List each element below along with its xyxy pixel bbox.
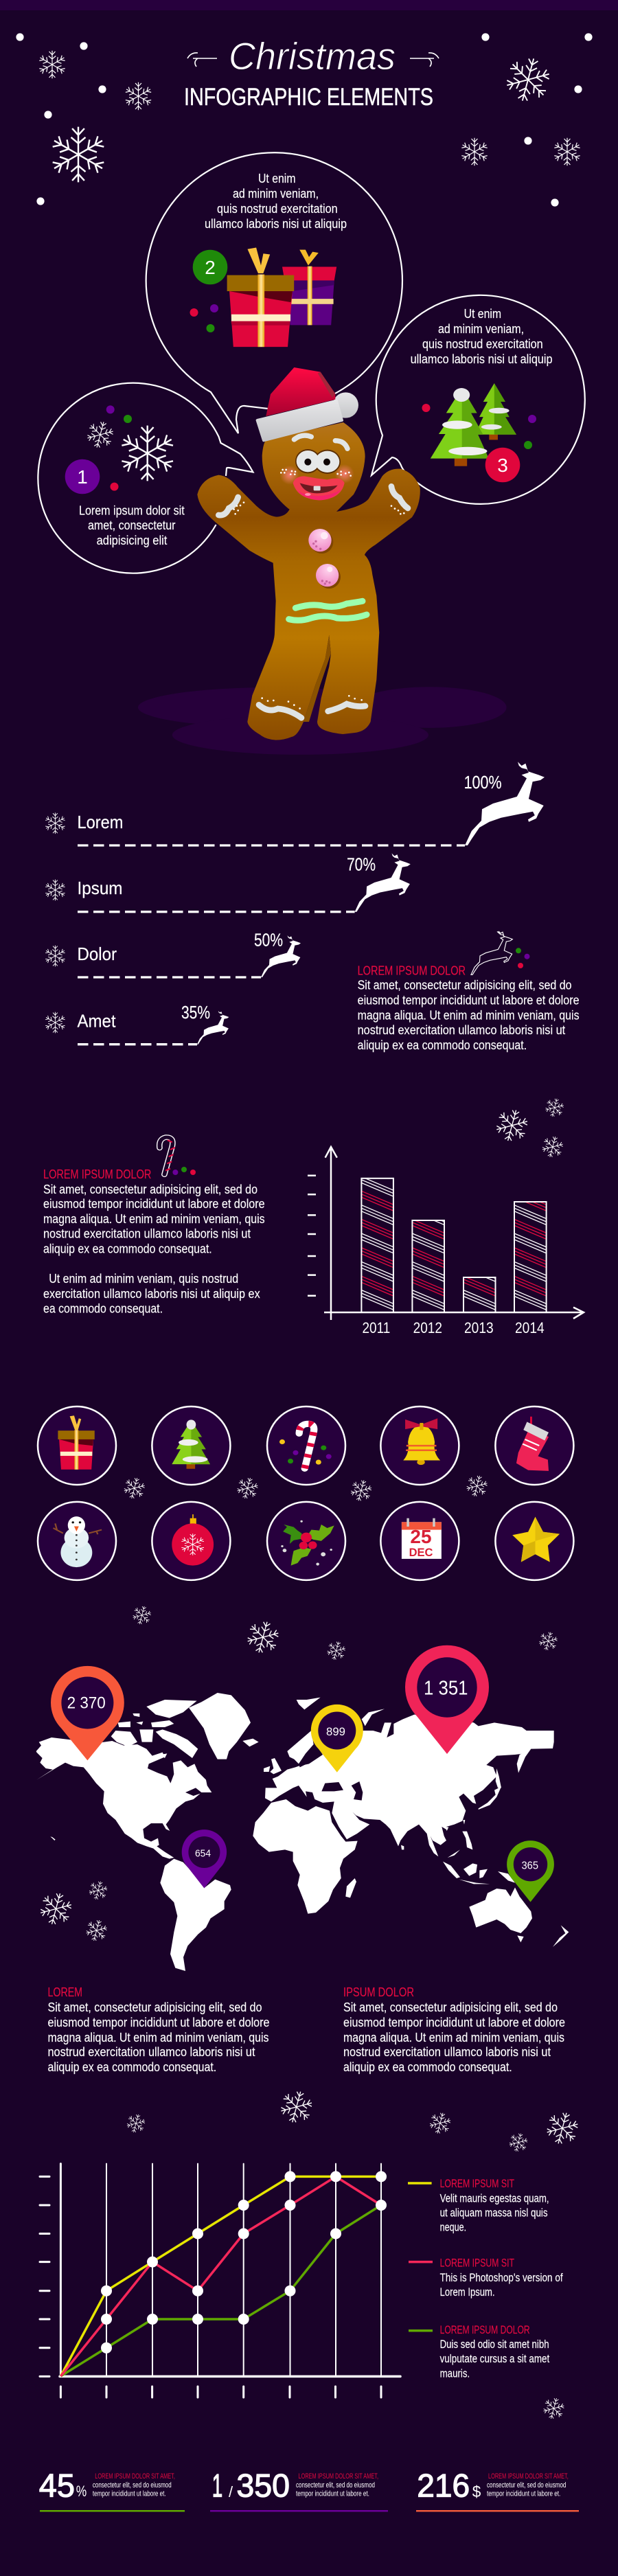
year labels: 2012 (413, 1319, 442, 1336)
row: Lorem (45, 762, 545, 845)
panel: icon grid (38, 1406, 573, 1580)
pin: 899 (311, 1705, 363, 1773)
series: green (60, 2205, 381, 2376)
stat: 216$: consectetur elit, sed do eiusmod (487, 2481, 566, 2489)
text block: Ipsum Dolor: magna aliqua. Ut enim ad minim veniam, quis (343, 2031, 564, 2044)
row: Dolor: 50% (254, 930, 283, 950)
legend item green: vulputate cursus a sit amet (440, 2352, 549, 2365)
grid and axes (40, 2164, 400, 2397)
bubble 1 text (79, 504, 185, 547)
text block: Ipsum Dolor: aliquip ex ea commodo consequat. (343, 2060, 512, 2074)
dots (422, 404, 536, 449)
text block: Ipsum Dolor: eiusmod tempor incididunt ut labore et dolore (343, 2016, 565, 2029)
text block with candy cane (43, 1137, 265, 1316)
paragraph: magna aliqua. Ut enim ad minim veniam, quis (43, 1212, 265, 1226)
legend item green: mauris. (440, 2367, 470, 2380)
snowflakes above map (36, 1604, 560, 1944)
subtitle: INFOGRAPHIC ELEMENTS (184, 83, 433, 111)
text block: Ipsum Dolor: nostrud exercitation ullamco laboris nisi ut (343, 2045, 551, 2059)
paragraph: exercitation ullamco laboris nisi ut aliquip ex (43, 1287, 260, 1301)
axes (308, 1147, 584, 1320)
text block: Ipsum Dolor: IPSUM DOLOR (343, 1985, 414, 1999)
paragraph: Sit amet, consectetur adipisicing elit, sed do (43, 1183, 258, 1196)
icon: holly (281, 1520, 334, 1566)
paragraph: aliquip ex ea commodo consequat. (358, 1038, 527, 1052)
legend item green (409, 2324, 549, 2380)
bubble 3 text: ullamco laboris nisi ut aliquip (411, 352, 553, 366)
pin: 365: 365 (522, 1860, 538, 1871)
bar 2014 (514, 1201, 547, 1312)
icon: gift (58, 1415, 95, 1470)
dots (190, 304, 218, 332)
icon: fir trees (431, 383, 516, 466)
calendar date: DEC (409, 1547, 433, 1559)
pin: 654 (182, 1830, 227, 1889)
bubble 3 (371, 295, 585, 504)
row: Lorem: Lorem (77, 812, 124, 832)
text block: Lorem: aliquip ex ea commodo consequat. (48, 2060, 216, 2074)
icons (53, 1415, 560, 1567)
icon: candy cane (279, 1424, 332, 1468)
row: Ipsum: Ipsum (77, 878, 122, 898)
badge 1: 1 (77, 466, 88, 488)
text block: Ipsum Dolor: Sit amet, consectetur adipisicing elit, sed do (343, 2001, 558, 2014)
bar 2013 (463, 1277, 496, 1312)
circle outlines (38, 1406, 573, 1580)
pin: 654: 654 (195, 1849, 211, 1860)
legend item red: Lorem Ipsum. (440, 2286, 495, 2299)
row: Amet: Amet (77, 1010, 116, 1031)
stat: 216$ (416, 2467, 579, 2511)
paragraph (43, 1183, 265, 1316)
bubble 1 text: Lorem ipsum dolor sit (79, 504, 185, 518)
legend (408, 2178, 563, 2380)
paragraph: eiusmod tempor incididunt ut labore et dolore (358, 994, 580, 1007)
legend item yellow: neque. (440, 2221, 466, 2233)
panel: reindeer progress chart (45, 762, 545, 1045)
icon: outline reindeer (471, 931, 512, 974)
title script word: Christmas (229, 34, 396, 78)
leg shade (304, 635, 331, 722)
heading: LOREM IPSUM DOLOR (43, 1167, 151, 1181)
paragraph: Sit amet, consectetur adipisicing elit, sed do (358, 979, 572, 992)
bubble 3 text: Ut enim (464, 307, 501, 321)
stat: 216$: tempor incididunt ut labore et. (487, 2490, 560, 2498)
green icing (289, 601, 367, 620)
paragraph: magna aliqua. Ut enim ad minim veniam, quis (358, 1008, 580, 1022)
series: yellow (60, 2176, 381, 2376)
flakes between icons (122, 1473, 490, 1503)
stat: 216$: $ (472, 2483, 481, 2500)
paragraph: aliquip ex ea commodo consequat. (43, 1242, 212, 1255)
text block: Lorem: magna aliqua. Ut enim ad minim veniam, quis (48, 2031, 269, 2044)
stat: 1,350: 1 (212, 2467, 222, 2504)
stat: 1,350 (210, 2467, 388, 2511)
badge 3: 3 (497, 455, 508, 476)
snowflakes above bar chart (492, 1096, 566, 1160)
row: Lorem: 100% (464, 772, 502, 793)
row: Amet (45, 1002, 229, 1045)
bar chart (308, 1147, 584, 1336)
text block: Lorem: nostrud exercitation ullamco laboris nisi ut (48, 2045, 255, 2059)
paragraph: ea commodo consequat. (43, 1302, 163, 1316)
hat pompom (333, 392, 358, 418)
badge 1 (65, 459, 100, 494)
gingerbread body (197, 422, 420, 740)
badge 2: 2 (205, 257, 216, 278)
legend item yellow: Velit mauris egestas quam, (440, 2192, 549, 2204)
data points (101, 2171, 387, 2353)
snowflakes around line chart (125, 2088, 582, 2421)
calendar date: 25 (410, 1526, 432, 1547)
icon: tree (172, 1420, 210, 1469)
pin: 1 351: 1 351 (424, 1677, 468, 1699)
icon: bell (403, 1418, 440, 1465)
year labels: 2013 (464, 1319, 494, 1336)
legend item red: LOREM IPSUM SIT (440, 2257, 514, 2269)
bubble 2 text (205, 172, 347, 231)
legend item yellow (408, 2178, 549, 2233)
bar 2012 (411, 1220, 445, 1312)
line chart (40, 2164, 400, 2397)
bar 2011 (361, 1176, 393, 1312)
paragraph: Ut enim ad minim veniam, quis nostrud (49, 1272, 238, 1286)
text block: Lorem: Sit amet, consectetur adipisicing elit, sed do (48, 2001, 262, 2014)
icon: stocking (516, 1417, 549, 1471)
icon: candy cane outline (159, 1137, 175, 1174)
text block: Lorem (48, 1985, 269, 2074)
map pins (51, 1645, 554, 1902)
series: red (60, 2176, 381, 2376)
text block with outline reindeer (358, 931, 580, 1052)
text block: Lorem: LOREM (48, 1985, 82, 1999)
bubble 2 text: Ut enim (258, 172, 295, 185)
text block: Lorem: eiusmod tempor incididunt ut labore et dolore (48, 2016, 269, 2029)
stat: 45% (39, 2467, 185, 2511)
paragraph: eiusmod tempor incididunt ut labore et dolore (43, 1197, 265, 1211)
dots (516, 948, 530, 968)
pin: 1 351 (405, 1645, 489, 1754)
row: Ipsum (45, 854, 411, 912)
bubble 2 text: ullamco laboris nisi ut aliquip (205, 217, 347, 231)
paragraph (358, 979, 580, 1052)
pin: 365 (507, 1840, 554, 1902)
year labels (363, 1319, 545, 1336)
bubble 3 text: quis nostrud exercitation (422, 337, 543, 351)
bubble 1 text: adipisicing elit (97, 534, 167, 547)
world map (36, 1693, 569, 1971)
eyebrows icing (294, 435, 347, 448)
mouth (293, 476, 345, 500)
row: Amet: 35% (181, 1002, 210, 1023)
stat: 45%: consectetur elit, sed do eiusmod (93, 2481, 172, 2489)
bubble 2 text: quis nostrud exercitation (217, 202, 338, 216)
stat: 1,350: LOREM IPSUM DOLOR SIT AMET, (298, 2472, 378, 2481)
pin: 2 370: 2 370 (67, 1694, 106, 1713)
pin: 2 370 (51, 1666, 124, 1760)
calendar date (409, 1526, 433, 1559)
stat: 216$: LOREM IPSUM DOLOR SIT AMET, (488, 2472, 569, 2481)
bubble 3 text: ad minim veniam, (438, 322, 524, 336)
bubble 1 text: amet, consectetur (88, 518, 176, 532)
icon: snowflakes (84, 418, 175, 481)
stat: 45%: LOREM IPSUM DOLOR SIT AMET, (95, 2472, 175, 2481)
legend item yellow: ut aliquam massa nisl quis (440, 2206, 548, 2220)
bubble 1 (38, 383, 253, 573)
legend item red: This is Photoshop's version of (440, 2271, 563, 2284)
eyes (295, 449, 341, 474)
stat: 1,350: consectetur elit, sed do eiusmod (296, 2481, 375, 2489)
paragraph: nostrud exercitation ullamco laboris nisi ut (358, 1023, 565, 1037)
text block: Ipsum Dolor (343, 1985, 565, 2074)
pin: 899: 899 (326, 1725, 345, 1738)
dots (106, 405, 132, 491)
stat: 1,350: / (229, 2483, 233, 2500)
title flourish left (187, 53, 217, 67)
icon: calendar (402, 1518, 442, 1559)
white icing (218, 486, 408, 718)
stat: 45%: tempor incididunt ut labore et. (93, 2490, 166, 2498)
falling snow: header dots and flakes (16, 33, 593, 207)
dots (172, 1167, 196, 1175)
stat: 216$: 216 (417, 2467, 470, 2504)
legend item yellow: LOREM IPSUM SIT (440, 2178, 514, 2190)
bubble 3 text (411, 307, 553, 366)
legend item green: Duis sed odio sit amet nibh (440, 2338, 549, 2351)
bubble 2 text: ad minim veniam, (233, 187, 319, 201)
heading: LOREM IPSUM DOLOR (358, 964, 466, 977)
stat: 1,350: 350 (236, 2467, 290, 2504)
icon: gifts (227, 248, 336, 347)
row: Ipsum: 70% (347, 854, 376, 875)
year labels: 2011 (363, 1319, 390, 1336)
row: Dolor: Dolor (77, 944, 117, 964)
cheeks (280, 464, 354, 485)
santa hat (258, 367, 342, 440)
title (184, 34, 439, 111)
stat: 45%: 45 (39, 2467, 75, 2504)
badge 2 (193, 250, 227, 284)
stat: 45%: % (76, 2483, 87, 2500)
year labels: 2014 (515, 1319, 545, 1336)
bubble 2 (146, 152, 402, 433)
panel: speech bubbles (38, 152, 585, 573)
stat: 1,350: tempor incididunt ut labore et. (296, 2490, 369, 2498)
badge 3 (485, 448, 520, 482)
legend item green: LOREM IPSUM DOLOR (440, 2324, 530, 2336)
icon: snowman (53, 1516, 102, 1567)
legend item red (409, 2257, 563, 2299)
ground shadow (138, 687, 507, 755)
icon: ornament (172, 1514, 214, 1566)
icon: star (512, 1517, 560, 1562)
candy buttons (308, 529, 341, 589)
paragraph: nostrud exercitation ullamco laboris nisi ut (43, 1227, 251, 1241)
title flourish right (410, 53, 439, 67)
row: Dolor (45, 930, 301, 977)
gingerbread man (197, 367, 420, 740)
